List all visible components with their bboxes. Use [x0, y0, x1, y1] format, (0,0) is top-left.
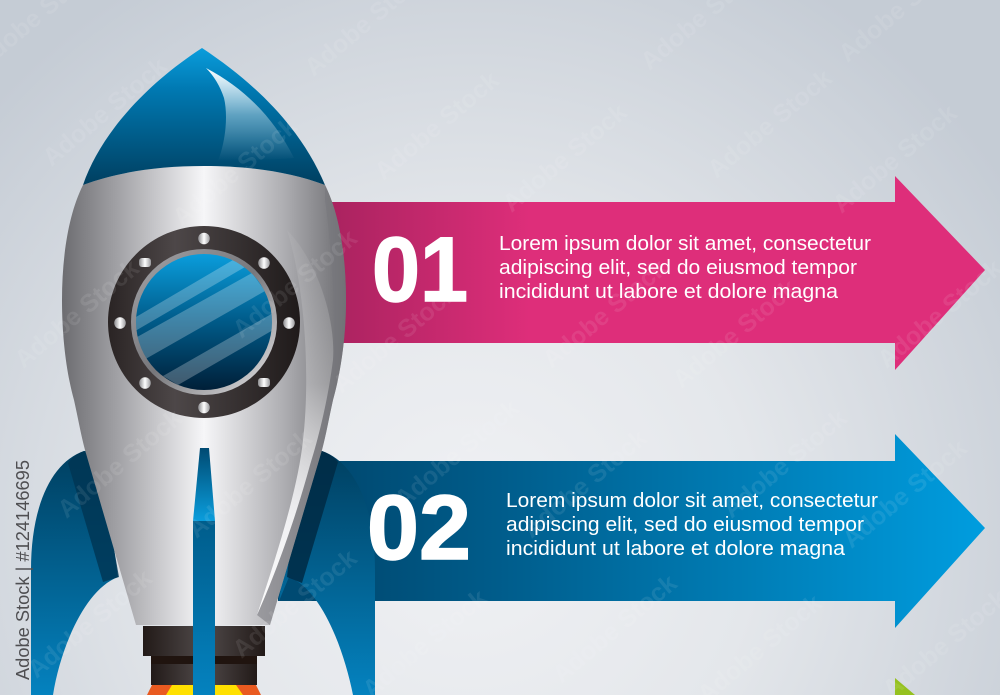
text block 2: incididunt ut labore et dolore magna — [506, 538, 846, 560]
text block 1 — [499, 233, 871, 303]
arrow 1: pink — [310, 176, 985, 370]
watermark: Adobe Stock — [389, 394, 524, 514]
watermark: Adobe Stock — [167, 112, 302, 232]
right fin — [279, 450, 375, 695]
text block 1: adipiscing elit, sed do eiusmod tempor — [499, 257, 857, 279]
watermark: Adobe Stock — [547, 569, 682, 689]
watermark: Adobe Stock — [517, 424, 652, 544]
watermark: Adobe Stock — [827, 99, 962, 219]
number 01: 01 — [372, 219, 468, 321]
engine collars — [143, 626, 265, 656]
watermark: Adobe Stock — [182, 424, 317, 544]
watermark: Adobe Stock — [717, 404, 852, 524]
text block 1: incididunt ut labore et dolore magna — [499, 281, 839, 303]
arrow 2: blue — [278, 434, 985, 628]
porthole — [108, 226, 300, 418]
bolts — [114, 233, 295, 413]
text block 2 — [506, 490, 878, 560]
number 02: 02 — [367, 477, 471, 579]
text block 2: Lorem ipsum dolor sit amet, consectetur — [506, 490, 878, 512]
watermark: Adobe Stock — [9, 254, 144, 374]
rocket — [31, 48, 375, 695]
center stripe tip — [193, 448, 215, 521]
watermark: Adobe Stock — [537, 254, 672, 374]
watermark: Adobe Stock — [227, 544, 362, 664]
center stripe — [193, 521, 215, 695]
nose cone — [83, 48, 325, 185]
watermark: Adobe Stock — [497, 98, 632, 218]
text block 2: adipiscing elit, sed do eiusmod tempor — [506, 514, 864, 536]
watermark: Adobe Stock — [667, 274, 802, 394]
watermark: Adobe Stock — [702, 64, 837, 184]
glass reflections — [130, 260, 280, 385]
watermark: Adobe Stock — [327, 279, 462, 399]
left fin — [31, 450, 118, 695]
watermark: Adobe Stock — [227, 224, 362, 344]
text block 1: Lorem ipsum dolor sit amet, consectetur — [499, 233, 871, 255]
body dark edge — [257, 185, 346, 625]
watermark: Adobe Stock — [52, 404, 187, 524]
side credit: Adobe Stock | #124146695 — [12, 460, 33, 680]
watermark: Adobe Stock — [22, 564, 157, 684]
nose highlight — [206, 68, 294, 161]
watermark: Adobe Stock — [369, 66, 504, 186]
rocket body — [62, 166, 346, 625]
watermark: Adobe Stock — [37, 52, 172, 172]
body highlight — [257, 230, 333, 615]
flames — [147, 685, 261, 695]
watermark: Adobe Stock — [837, 434, 972, 554]
arrow 3: green tip — [895, 678, 915, 695]
